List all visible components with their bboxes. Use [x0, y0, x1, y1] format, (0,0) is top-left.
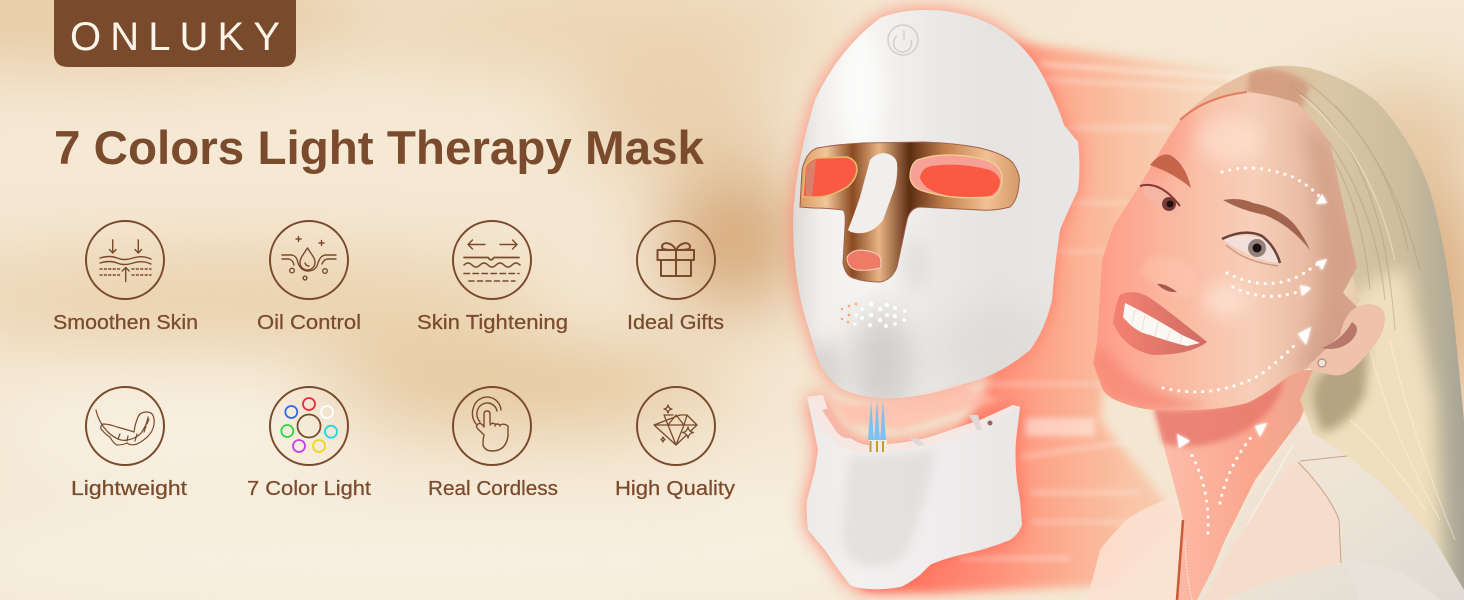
model portrait	[1087, 60, 1464, 600]
left eye and brow	[1140, 154, 1191, 215]
right eye and brow	[1222, 199, 1310, 266]
jacket right side	[1197, 420, 1464, 600]
clips	[910, 415, 982, 446]
feature: 7 Color Light	[247, 387, 371, 500]
label: 7 Color Light	[247, 478, 371, 500]
label: Oil Control	[257, 312, 361, 334]
brand badge: ONLUKY	[70, 15, 280, 59]
smile	[1113, 292, 1207, 355]
feature: Ideal Gifts	[627, 221, 724, 334]
face	[1093, 60, 1360, 410]
icon: smoothen skin	[86, 221, 164, 299]
icon: feather	[86, 387, 164, 465]
ear and earring	[1307, 304, 1385, 375]
label: High Quality	[615, 478, 735, 500]
feature: Oil Control	[257, 221, 361, 334]
feature: Skin Tightening	[417, 221, 568, 334]
label: Skin Tightening	[417, 312, 568, 334]
feature: Lightweight	[71, 387, 188, 500]
icon: diamond	[637, 387, 715, 465]
feature: Real Cordless	[428, 387, 558, 500]
icon: skin tightening	[453, 221, 531, 299]
product: LED face mask	[793, 10, 1080, 420]
icon: gift box	[637, 221, 715, 299]
connector pins	[868, 400, 887, 453]
mask shading	[802, 30, 1070, 420]
label: Ideal Gifts	[627, 312, 724, 334]
nose	[1140, 256, 1196, 298]
power button	[888, 25, 918, 55]
hair	[1180, 66, 1464, 600]
label: Smoothen Skin	[53, 312, 198, 334]
jacket left side	[1087, 497, 1182, 600]
neck	[1153, 370, 1320, 600]
feature: High Quality	[615, 387, 735, 500]
icon: touch hand	[453, 387, 531, 465]
brand badge	[54, 0, 296, 67]
mouth vent dots	[841, 302, 907, 328]
feature: Smoothen Skin	[53, 221, 198, 334]
label: Real Cordless	[428, 478, 558, 500]
light beams from mask to face	[860, 40, 1260, 594]
icon: seven color rings	[270, 387, 348, 465]
gold eye frame	[800, 142, 1019, 282]
title: 7 Colors Light Therapy Mask	[54, 121, 705, 174]
label: Lightweight	[71, 478, 188, 500]
icon: oil control	[270, 221, 348, 299]
dotted lifting arrows	[1163, 168, 1327, 533]
product: LED neck piece	[807, 385, 1022, 589]
